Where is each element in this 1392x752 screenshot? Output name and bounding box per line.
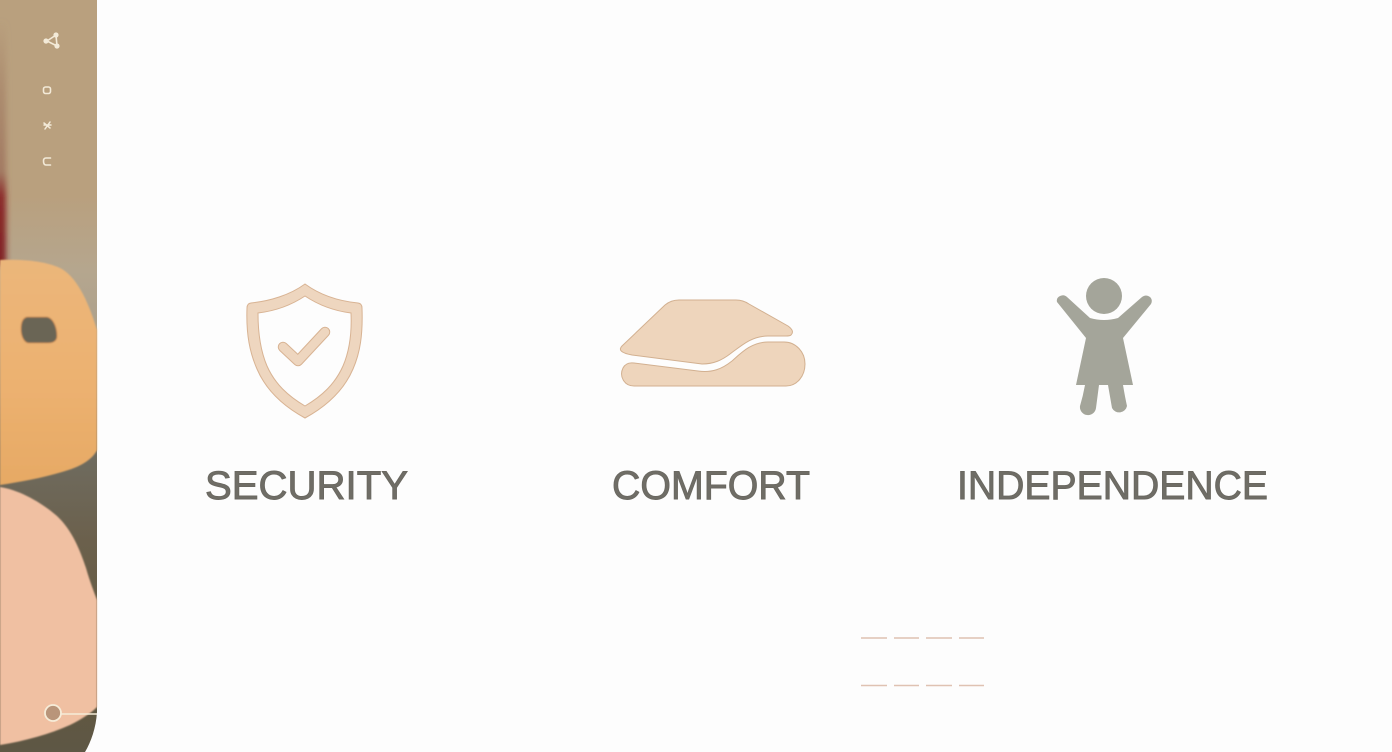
heading: comfort: COMFORT [612, 464, 810, 508]
peach cushion [0, 487, 97, 745]
icon: small C [44, 158, 50, 165]
dashed lines: top row [861, 637, 984, 639]
panel: security [205, 284, 408, 508]
heading: security: SECURITY [205, 464, 408, 508]
icon: small square [44, 87, 50, 94]
panel: photo sidebar [0, 0, 98, 752]
slider handle [45, 705, 97, 721]
icon: shield with check [247, 284, 362, 418]
dashed lines: bottom row [861, 684, 984, 686]
icon: share [44, 33, 59, 48]
panel: comfort [612, 300, 810, 508]
sidebar corner [85, 712, 98, 752]
icon: small star [44, 122, 51, 129]
heading: independence: INDEPENDENCE [957, 464, 1268, 508]
orange cushion [0, 260, 97, 485]
icon: child with raised arms [1057, 278, 1152, 415]
icon: folded blanket [620, 300, 805, 386]
panel: independence [957, 278, 1268, 508]
